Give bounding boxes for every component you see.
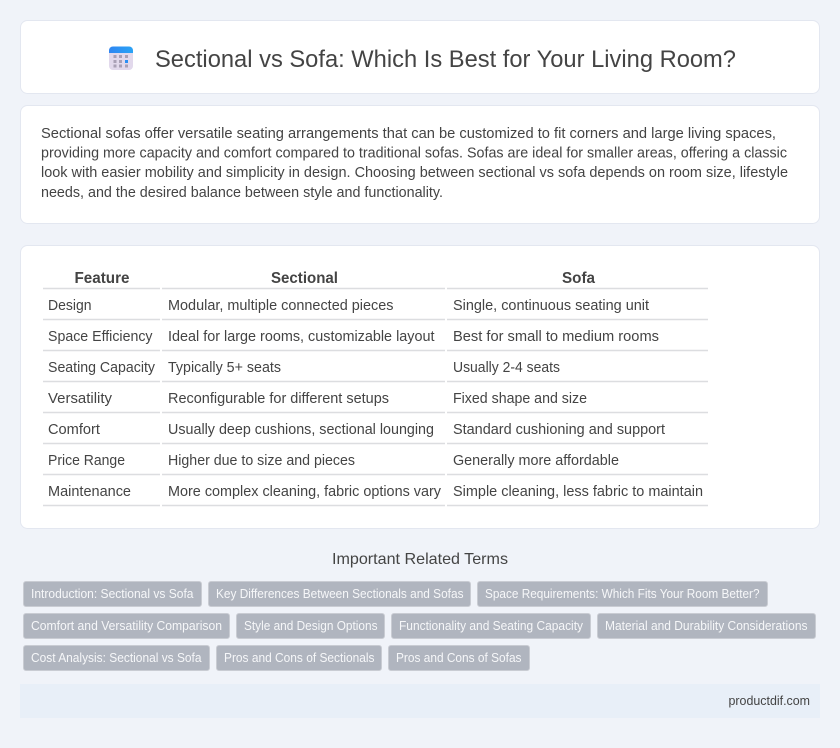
tag: Style and Design Options [244,619,378,633]
row: price range: Generally more affordable [453,453,619,469]
tag: Pros and Cons of Sectionals [224,651,374,665]
row: space efficiency: Ideal for large rooms, customizable layout [168,329,434,345]
table header row: Sofa [562,270,595,287]
row: design: Design [48,298,92,314]
row: maintenance: More complex cleaning, fabric options vary [168,484,442,500]
row: space efficiency: Space Efficiency [48,329,153,345]
row: maintenance: Maintenance [48,484,131,500]
heading: important related terms: Important Related Terms [332,551,508,568]
tag: Comfort and Versatility Comparison [31,619,222,633]
panel: comparison table [20,246,820,528]
tag [392,614,590,638]
panel: intro paragraph: look with easier mobility and simplicity in design. Choosing between sectional vs sofa depends on room size, lifestyle [41,165,788,181]
tag [388,646,530,670]
tag [208,582,470,606]
row: comfort: Standard cushioning and support [453,422,665,438]
tag: Functionality and Seating Capacity [399,619,584,633]
row: price range: Higher due to size and pieces [168,453,355,469]
tag [216,646,382,670]
row: seating capacity [48,360,560,376]
row: comfort [48,422,665,438]
table header row: Feature [74,270,130,287]
tag: Material and Durability Considerations [605,619,808,633]
row: versatility: Reconfigurable for different setups [168,391,389,407]
tag [24,614,230,638]
row: price range: Price Range [48,453,125,469]
row: seating capacity: Seating Capacity [48,360,156,376]
row: price range [48,453,619,469]
row: space efficiency: Best for small to medium rooms [453,329,659,345]
tag: Pros and Cons of Sofas [396,651,522,665]
panel: intro paragraph: providing more capacity and comfort compared to traditional sofas. Sofas are ideal for smaller areas, offering a classic [41,146,787,162]
row: maintenance: Simple cleaning, less fabric to maintain [453,484,703,500]
table header row [74,270,595,287]
row: versatility: Versatility [48,391,113,407]
row: comfort: Comfort [48,422,100,438]
tag: Space Requirements: Which Fits Your Room Better? [485,587,760,601]
panel: intro paragraph: Sectional sofas offer versatile seating arrangements that can be customized to fit corners and large living spaces, [41,126,776,142]
row: seating capacity: Usually 2-4 seats [453,360,560,376]
tag [236,614,384,638]
panel: intro paragraph: needs, and the desired balance between style and functionality. [41,185,443,201]
related term tags [24,582,816,670]
tag [598,614,816,638]
footer: productdif.com [728,693,810,708]
tag [24,582,202,606]
row: design: Modular, multiple connected pieces [168,298,394,314]
tag: Key Differences Between Sectionals and Sofas [216,587,464,601]
row: design [48,298,649,314]
row: design: Single, continuous seating unit [453,298,649,314]
title: Sectional vs Sofa: Which Is Best for Your Living Room? [155,46,736,73]
tag [24,646,210,670]
row: maintenance [48,484,703,500]
tag: Cost Analysis: Sectional vs Sofa [31,651,202,665]
row: versatility: Fixed shape and size [453,391,587,407]
table header row: Sectional [271,270,338,287]
footer [20,684,820,718]
tag: Introduction: Sectional vs Sofa [31,587,194,601]
row: space efficiency [48,329,659,345]
row: versatility [48,391,587,407]
row: seating capacity: Typically 5+ seats [168,360,281,376]
row: comfort: Usually deep cushions, sectional lounging [168,422,434,438]
tag [478,582,768,606]
header panel [20,20,820,94]
panel: intro paragraph [20,106,820,224]
icon: calendar [109,46,133,70]
